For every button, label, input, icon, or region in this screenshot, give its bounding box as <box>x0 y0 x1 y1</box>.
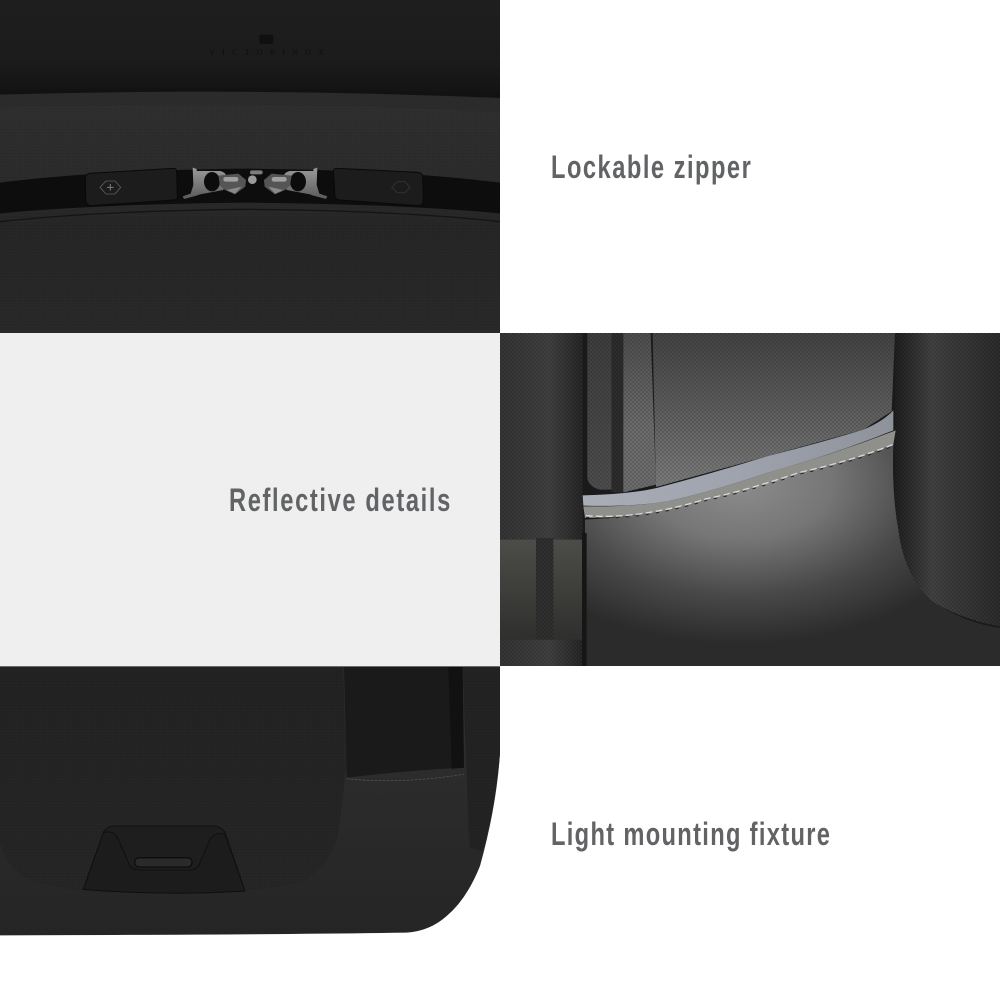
upper zipper band <box>0 92 500 110</box>
upper backpack fabric <box>0 0 500 97</box>
text: light mounting fixture: Light mounting fixture <box>551 817 830 852</box>
panel: light mounting fixture photo <box>0 666 500 935</box>
side gusset texture <box>463 667 500 851</box>
main mesh panel <box>653 333 895 487</box>
panel top edge <box>0 666 500 667</box>
panel base <box>0 0 500 333</box>
panel: lockable zipper photo <box>0 0 500 333</box>
fabric weave texture <box>0 99 500 333</box>
side gusset <box>463 667 500 851</box>
side pocket inner fold <box>448 667 464 769</box>
lower backpack fabric <box>0 99 500 333</box>
left zipper pull tab <box>85 168 177 206</box>
side pocket <box>344 667 464 778</box>
front fabric panel <box>0 666 346 893</box>
slider centre link <box>248 170 263 184</box>
webbing strap <box>587 333 656 492</box>
main mesh texture <box>653 333 895 487</box>
left mesh <box>500 333 583 666</box>
light mounting fixture <box>83 826 245 893</box>
text: lockable zipper: Lockable zipper <box>551 150 751 185</box>
shadow gap beside pocket <box>582 533 587 666</box>
left slider <box>183 168 246 199</box>
photo base <box>582 333 1000 628</box>
left mesh texture <box>500 333 583 666</box>
backpack silhouette <box>0 666 500 935</box>
brand logo <box>209 35 324 57</box>
leather corner stitching <box>347 774 464 781</box>
main zipper channel <box>0 169 500 213</box>
grey leather pocket <box>585 445 1000 666</box>
right slider <box>264 168 327 199</box>
fabric weave texture <box>0 666 346 893</box>
lower webbing band <box>500 538 583 640</box>
reflective strip <box>583 410 893 506</box>
stitching shadow <box>586 446 893 518</box>
brand logo: VICTORINOX <box>209 48 324 57</box>
right padded mesh <box>895 333 1000 626</box>
zipper stitching <box>0 209 500 222</box>
lockable zipper sliders <box>183 168 327 199</box>
right zipper pull tab <box>333 168 423 206</box>
panel: reflective details label background <box>0 333 500 666</box>
contrast stitching <box>586 445 893 516</box>
text: reflective details: Reflective details <box>229 483 450 518</box>
upper zipper shadow <box>0 90 500 98</box>
panel: reflective details photo <box>500 333 1000 666</box>
piping above stitching <box>583 430 896 518</box>
